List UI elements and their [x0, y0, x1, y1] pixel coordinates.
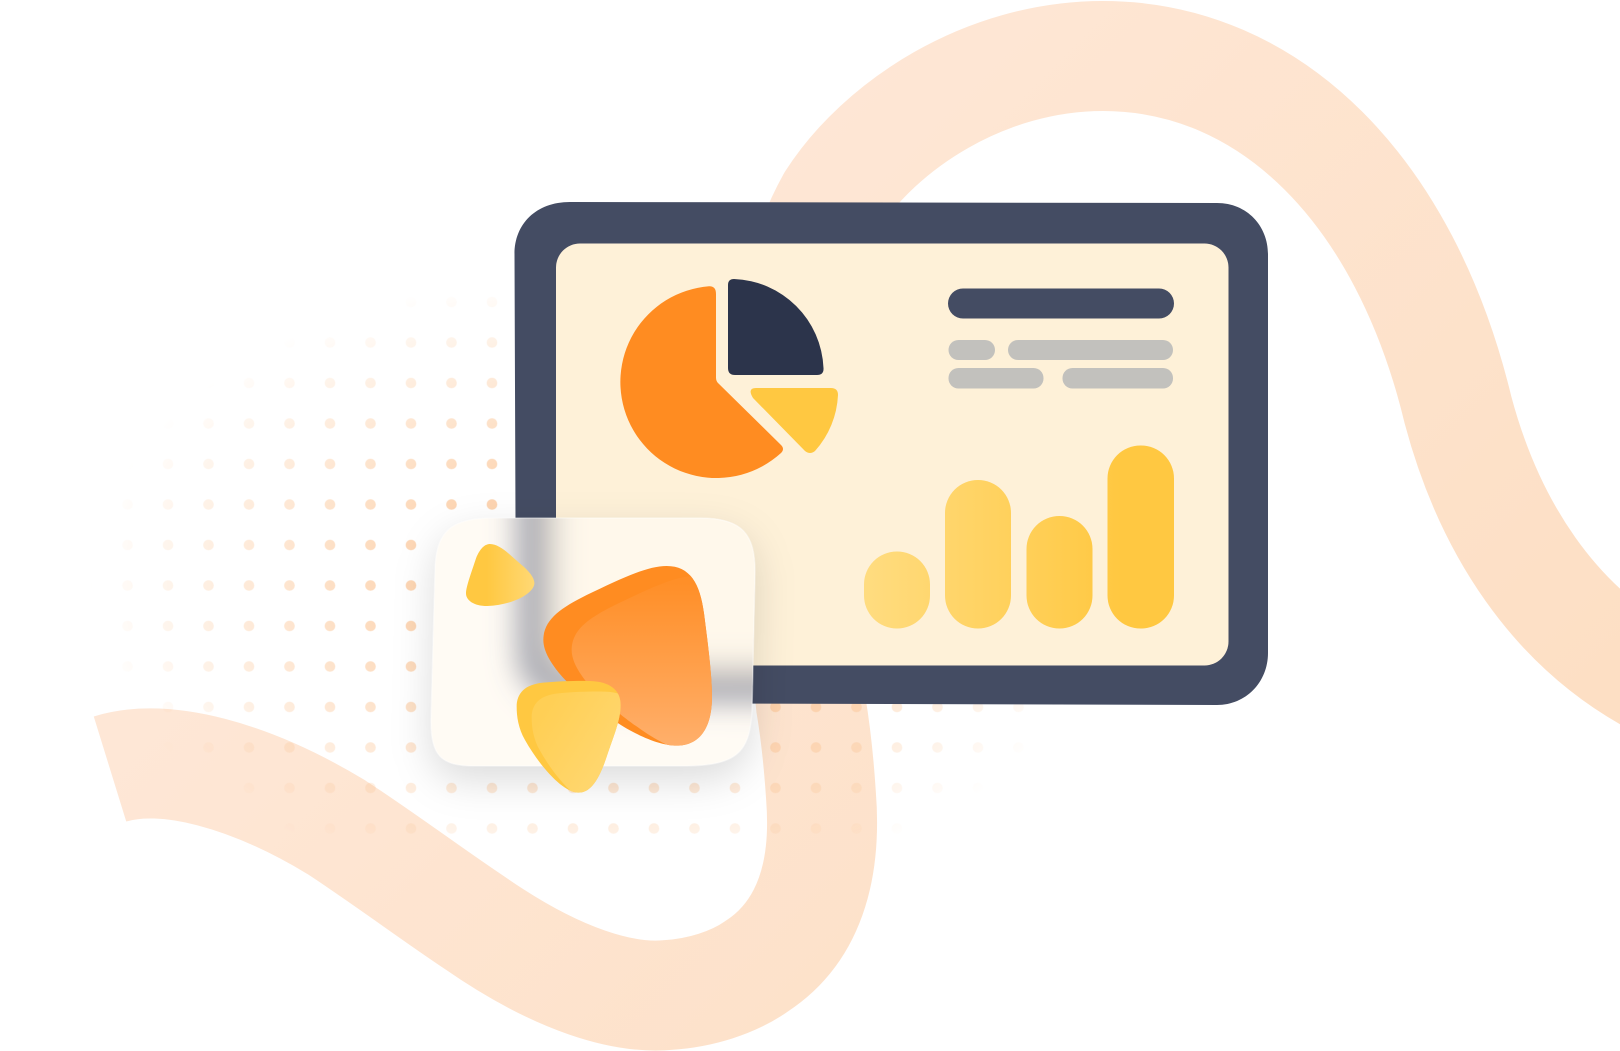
- heading placeholder bar: [948, 288, 1174, 318]
- device frame: [514, 202, 1268, 705]
- pie slice: navy quarter: [728, 279, 824, 375]
- pie chart: [620, 279, 838, 478]
- pie slice: large orange: [620, 286, 783, 478]
- glass card with blurred backdrop: [431, 518, 755, 766]
- dot grid background: [123, 300, 1024, 834]
- glass card edge: [431, 518, 755, 766]
- shape: lower yellow rounded triangle: [516, 680, 621, 793]
- glass card shadow: [431, 532, 755, 780]
- text placeholder lines: [948, 340, 1173, 388]
- glass card shapes: [466, 544, 712, 793]
- shape: small yellow rounded triangle: [466, 544, 534, 606]
- tablet device: [514, 202, 1268, 705]
- bar chart: [864, 446, 1174, 628]
- device screen: [556, 244, 1228, 666]
- pie slice: small yellow: [751, 388, 838, 453]
- shape: large orange rounded triangle: [543, 566, 712, 746]
